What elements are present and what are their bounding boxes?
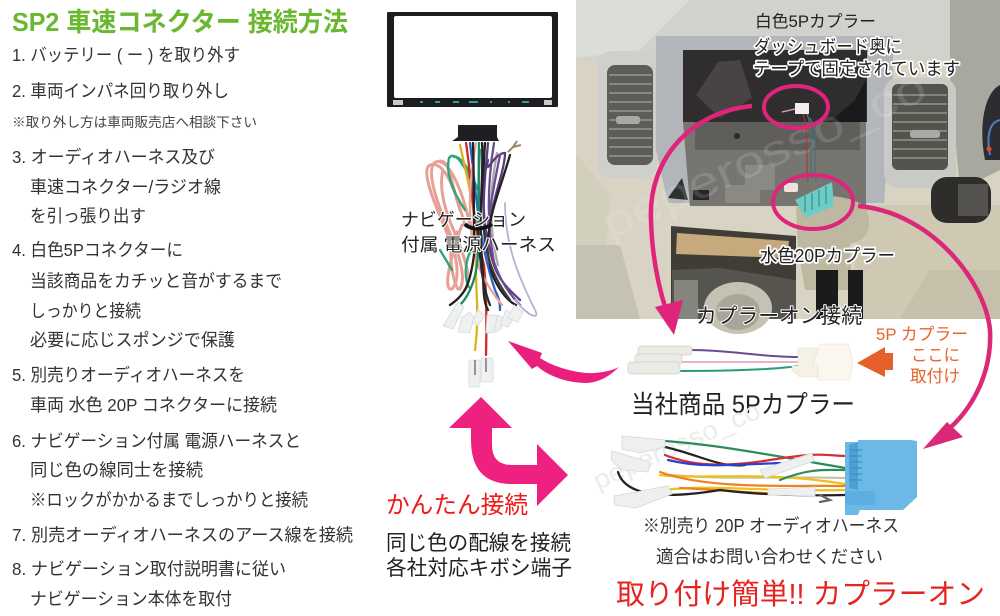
label: our product: 当社商品 5Pカプラー <box>631 391 855 419</box>
steps list: 当該商品をカチッと音がするまで <box>30 271 282 291</box>
white 5P coupler in photo <box>782 103 809 114</box>
arrow: double pink <box>449 397 568 506</box>
label: easy connection: かんたん接続 <box>386 492 528 519</box>
cyan 20P coupler in photo <box>784 182 834 218</box>
label: sold separately: ※別売り 20P オーディオハーネス <box>643 516 899 536</box>
orange note: 取付け <box>910 367 960 386</box>
wires <box>806 112 816 180</box>
label: fixed with tape: テープで固定されています <box>753 59 960 79</box>
navigation monitor <box>387 12 558 107</box>
arrow: product to harness <box>508 341 619 383</box>
label: white 5P coupler: 白色5Pカプラー <box>755 12 876 31</box>
navigation power harness <box>427 125 536 387</box>
20P audio harness <box>588 395 917 515</box>
title: SP2 車速コネクター 接続方法 <box>12 7 348 37</box>
label: navigation harness: ナビゲーション <box>401 210 526 230</box>
gear lever <box>796 196 869 290</box>
steps list: 2. 車両インパネ回り取り外し <box>12 81 229 101</box>
label: coupler-on connection: カプラーオン接続 <box>696 305 862 328</box>
arrow: orange pointer <box>857 347 893 377</box>
gauge <box>982 85 1000 160</box>
circle: 20P <box>773 175 853 229</box>
orange note <box>876 325 968 386</box>
steps list: 4. 白色5Pコネクターに <box>12 240 183 260</box>
steps list: 5. 別売りオーディオハーネスを <box>12 365 245 385</box>
steps list: 1. バッテリー ( ー ) を取り外す <box>12 45 240 65</box>
steps list: 車速コネクター/ラジオ線 <box>30 177 221 197</box>
5P product coupler <box>628 344 853 380</box>
stalk <box>931 177 991 223</box>
right vent <box>884 78 956 188</box>
label: compatibility: 適合はお問い合わせください <box>656 547 883 567</box>
steps list: 6. ナビゲーション付属 電源ハーネスと <box>12 431 301 451</box>
steps list: ※ロックがかかるまでしっかりと接続 <box>30 490 308 510</box>
steps list: しっかりと接続 <box>30 301 141 321</box>
label: terminals: 各社対応キボシ端子 <box>386 557 572 580</box>
orange note: 5P カプラー <box>876 325 968 344</box>
headline: easy install: 取り付け簡単!! カプラーオン <box>616 578 985 611</box>
arrow: photo 20P to harness <box>858 206 990 449</box>
steps list <box>12 45 353 609</box>
center opening <box>656 36 893 206</box>
label: behind dashboard: ダッシュボード奥に <box>754 37 902 57</box>
label: cyan 20P coupler: 水色20Pカプラー <box>760 246 895 266</box>
steps list: 7. 別売オーディオハーネスのアース線を接続 <box>12 525 353 545</box>
steps list: 8. ナビゲーション取付説明書に従い <box>12 559 286 579</box>
label: included power harness: 付属 電源ハーネス <box>401 235 556 255</box>
photo: dashboard with connectors <box>576 0 1000 334</box>
watermark: peperosso_co <box>594 62 934 249</box>
circle: 5P <box>764 86 828 128</box>
arrow: photo 5P to product <box>651 106 752 335</box>
steps list: 3. オーディオハーネス及び <box>12 147 215 167</box>
climate panel <box>671 226 796 334</box>
steps list: ナビゲーション本体を取付 <box>30 589 232 609</box>
label: same colour: 同じ色の配線を接続 <box>386 532 571 555</box>
steps list: 同じ色の線同士を接続 <box>30 460 203 480</box>
steps list: を引っ張り出す <box>30 206 146 226</box>
left vent <box>597 51 657 178</box>
steps list: 必要に応じスポンジで保護 <box>30 330 235 350</box>
steps list: 車両 水色 20P コネクターに接続 <box>30 395 277 415</box>
orange note: ここに <box>911 346 960 365</box>
20P audio harness: peperosso_co <box>588 395 765 495</box>
steps list: ※取り外し方は車両販売店へ相談下さい <box>12 115 257 130</box>
